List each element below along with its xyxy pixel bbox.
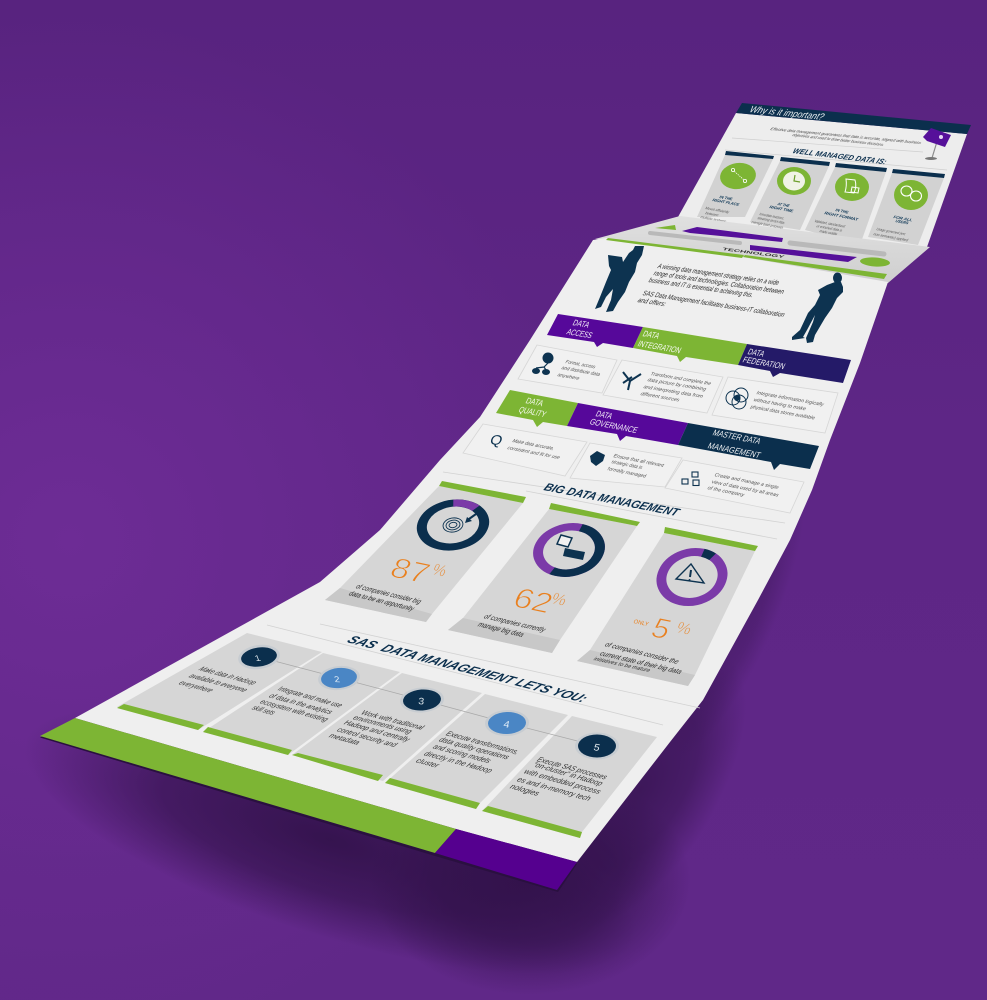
tab: data access xyxy=(547,314,643,348)
card: right time: AT THE xyxy=(776,202,791,208)
step card 5: “on-cluster” in Hadoop xyxy=(531,761,606,787)
step badge 2 xyxy=(317,664,361,692)
tab: data quality: DATA xyxy=(524,396,545,408)
text: transform: different sources xyxy=(639,392,681,403)
card: for all users: FOR ALL xyxy=(892,215,914,222)
text: transform xyxy=(639,372,712,403)
text: create and manage: view of data used by all areas xyxy=(710,480,780,498)
text: create and manage: Create and manage a single xyxy=(713,473,780,491)
tab: master data management: MASTER DATA xyxy=(711,428,763,446)
donut 5 xyxy=(653,547,731,607)
step card 2: skill sets xyxy=(249,704,278,716)
caption xyxy=(592,641,685,676)
intro copy: range of tools and technologies. Collaboration between xyxy=(652,269,786,296)
card: right format xyxy=(805,163,887,245)
tab: data federation xyxy=(738,344,851,383)
text: ensure: formally managed xyxy=(606,467,647,479)
step card 5 xyxy=(482,716,657,838)
intro text: objectives and used to drive better business decisions. xyxy=(791,133,885,147)
step card 2 xyxy=(203,653,400,755)
row one content boxes xyxy=(518,345,838,433)
icon: dice xyxy=(682,472,699,486)
caption: of companies currently xyxy=(482,613,548,634)
text: ensure: Ensure that all relevant xyxy=(612,454,665,469)
caption: initiatives to be mature xyxy=(592,657,652,674)
step badge 2: 2 xyxy=(333,675,341,684)
text: format access: anywhere xyxy=(556,373,581,382)
icon: warning triangle xyxy=(676,564,704,583)
number 5: 5 xyxy=(646,612,676,646)
tab: data access: ACCESS xyxy=(565,327,594,340)
text: make data accurate xyxy=(506,439,561,461)
paper: main xyxy=(40,238,888,892)
green bar right xyxy=(743,255,887,279)
text: make data accurate: Make data accurate, xyxy=(511,439,555,452)
icon: Q: Q xyxy=(488,433,504,449)
step card 3: Hadoop and centrally xyxy=(341,719,413,743)
intro copy: SAS Data Management facilitates business-IT collaboration xyxy=(641,289,787,319)
tab: master data management: MANAGEMENT xyxy=(706,441,763,460)
grey pill right xyxy=(790,243,884,254)
grey pill left xyxy=(650,233,740,243)
text: make data accurate: consistent and fit for use xyxy=(506,446,561,461)
step badge 5: 5 xyxy=(592,743,601,754)
green oval badge xyxy=(860,256,890,268)
intro copy xyxy=(636,262,787,319)
stat card: 62 percent xyxy=(448,503,640,653)
text: integrate information: without having to make xyxy=(751,397,807,412)
heading: why is it important: Why is it important? xyxy=(748,105,826,123)
step card 4: Execute transformations, xyxy=(443,730,522,756)
card: right place xyxy=(697,151,774,224)
step badge 4 xyxy=(485,709,529,737)
text: format access: Format, access xyxy=(564,360,597,370)
percent: % xyxy=(673,618,695,638)
silhouette right xyxy=(792,272,843,343)
step card 3: Work with traditional xyxy=(358,709,427,731)
step card 1: Make data in Hadoop xyxy=(196,665,260,686)
fold strip xyxy=(595,216,930,283)
caption: of companies consider the xyxy=(603,641,681,666)
caption xyxy=(347,583,424,612)
tab: data integration xyxy=(633,327,747,365)
step card 4: directly in the Hadoop xyxy=(421,750,496,774)
tab: data federation: FEDERATION xyxy=(741,355,787,371)
tab: data integration: INTEGRATION xyxy=(636,339,683,355)
caption: manage big data xyxy=(476,621,527,639)
purple ribbon one xyxy=(682,227,783,242)
tab: data integration: DATA xyxy=(641,329,661,340)
card: right time: oversight batch processes xyxy=(750,220,784,230)
icon: flag xyxy=(923,128,951,160)
step card 4: data quality operations xyxy=(436,736,512,761)
card: right time: RIGHT TIME xyxy=(768,205,795,213)
icon: integration arrows xyxy=(623,372,641,390)
caption: data to be an opportunity xyxy=(347,590,417,612)
card: right place: between xyxy=(704,211,720,217)
heading: big data management: BIG DATA MANAGEMENT xyxy=(541,481,683,519)
step card 1: everywhere xyxy=(176,679,217,694)
percent: % xyxy=(429,560,450,580)
heading: sas data management lets you: SAS DATA MANAGEMENT LETS YOU: xyxy=(344,634,591,705)
text: integrate information: Integrate information logically xyxy=(755,391,825,408)
step badge 1: 1 xyxy=(253,654,262,663)
donut 87 xyxy=(399,489,507,561)
step card 1: available to everyone xyxy=(186,672,251,693)
step badge 3 xyxy=(399,686,445,714)
text: create and manage: of the company xyxy=(706,486,746,498)
label only: ONLY xyxy=(632,619,649,628)
caption: of companies consider big xyxy=(354,583,424,605)
step card 3: metadata xyxy=(326,732,363,746)
card: right place: IN THE xyxy=(718,195,734,201)
text: create and manage xyxy=(706,473,780,498)
step card 3 xyxy=(292,673,482,781)
card: right place: multiple systems xyxy=(699,215,728,224)
tab: data access: DATA xyxy=(571,318,591,329)
step badge 5 xyxy=(575,732,619,760)
step card 5: Execute SAS processes xyxy=(535,756,610,781)
card: right time: streaming sensor data, xyxy=(756,216,786,225)
step badge 3: 3 xyxy=(418,697,425,707)
card: for all users: USERS xyxy=(894,219,910,225)
heading: well managed data is: WELL MANAGED DATA IS: xyxy=(791,147,889,166)
step card 2: ecosystem with existing xyxy=(257,698,331,723)
text: integrate information: physical data stores available xyxy=(749,405,816,421)
green bar left xyxy=(606,238,744,258)
text: format access xyxy=(556,360,601,382)
text: transform: data picture by combining xyxy=(646,378,707,392)
panel: why is it important xyxy=(678,103,971,247)
caption: current state of their big data xyxy=(598,650,685,676)
card: right format: Validated, standardized xyxy=(813,219,846,228)
card: for all users: non-semantic) applied xyxy=(872,232,909,242)
card: right format: IN THE xyxy=(834,208,850,214)
step connector xyxy=(259,657,597,746)
tab: master data management xyxy=(678,423,819,470)
card: right time xyxy=(750,157,830,230)
header band xyxy=(736,103,971,134)
step badge 4: 4 xyxy=(502,720,511,731)
text: ensure xyxy=(606,454,665,479)
green arrow xyxy=(655,225,676,230)
step card 4 xyxy=(385,694,568,809)
step card 2: of data in the analytics xyxy=(266,692,335,716)
card: right format: RIGHT FORMAT xyxy=(823,211,860,222)
number 62: 62 xyxy=(508,582,558,620)
donut 62 xyxy=(529,521,609,579)
icon: shield xyxy=(590,451,605,466)
step badge 1 xyxy=(237,642,281,672)
icon: network globe xyxy=(532,352,554,375)
tab: data quality: QUALITY xyxy=(517,405,548,419)
step card 5: nologies xyxy=(507,783,542,797)
text: ensure: strategic data is xyxy=(610,460,644,471)
stat card: 87 percent xyxy=(325,481,526,622)
bottom bar purple xyxy=(435,829,577,890)
step card 1 xyxy=(117,633,322,730)
intro copy: and offers: xyxy=(636,296,668,308)
percent: % xyxy=(548,589,570,609)
intro text: Effective data management guarantees that data is accurate, aligned with business xyxy=(769,127,923,145)
icon: document and folder xyxy=(557,535,585,560)
text: format access: and distribute data xyxy=(560,366,601,378)
stat card: 5 percent xyxy=(577,527,758,686)
purple ribbon two xyxy=(750,245,857,262)
step card 4: cluster xyxy=(413,757,442,769)
text: transform: and interpreting data from xyxy=(642,385,705,400)
step card 2: Integrate and make use xyxy=(275,685,346,709)
card: right place: RIGHT PLACE xyxy=(711,198,741,207)
icon: target xyxy=(442,514,476,534)
card: for all users xyxy=(868,169,945,245)
step card 5: es and in-memory tech xyxy=(515,776,594,802)
card: right time: Immediate reactions, xyxy=(758,212,786,220)
card: right place: Moves efficiently xyxy=(704,206,731,214)
row two content boxes xyxy=(463,424,804,513)
text: integrate information xyxy=(749,391,825,421)
number 87: 87 xyxy=(385,552,435,590)
step card 3: environments using xyxy=(350,714,415,735)
tab: data governance: GOVERNANCE xyxy=(588,417,640,435)
step card 5: with embedded process xyxy=(521,768,604,796)
card: for all users: Usage governed (ext xyxy=(875,227,907,236)
card: right format: or enriched data is xyxy=(815,224,844,233)
text: transform: Transform and complete the xyxy=(649,372,712,387)
intro copy: A winning data management strategy relies on a wide xyxy=(656,262,781,287)
icon: venn xyxy=(726,388,748,409)
tab: data governance xyxy=(567,403,688,445)
step card 3: control security and xyxy=(334,726,400,749)
step card 4: and scoring models xyxy=(430,743,494,764)
tab: data governance: DATA xyxy=(594,409,614,421)
bottom bar green xyxy=(40,718,456,853)
strip label: TECHNOLOGY xyxy=(721,247,786,259)
tab: data quality xyxy=(496,390,578,427)
silhouette left xyxy=(595,246,644,312)
intro copy: business and IT is essential to achieving this. xyxy=(647,276,755,299)
card: right format: made usable xyxy=(818,229,839,236)
tab: data federation: DATA xyxy=(746,347,766,358)
